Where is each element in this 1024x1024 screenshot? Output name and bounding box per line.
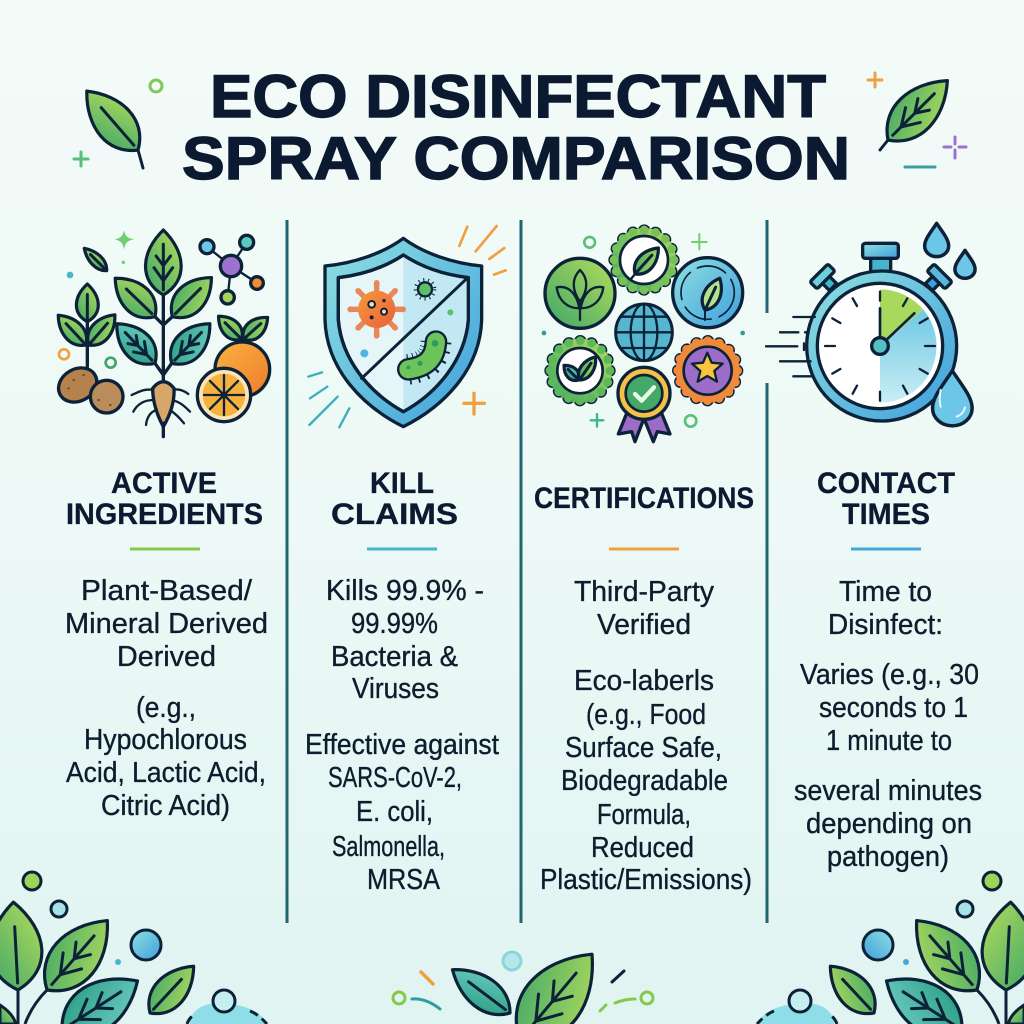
pathogens text bbox=[305, 729, 499, 896]
examples text: Hypochlorous bbox=[84, 724, 247, 756]
column dividers bbox=[287, 220, 767, 923]
virus bbox=[348, 281, 406, 338]
heading bbox=[817, 467, 955, 531]
small green microbe bbox=[416, 280, 434, 299]
badge: orange star seal bbox=[676, 339, 740, 403]
pathogens text: SARS-CoV-2, bbox=[328, 762, 462, 794]
examples text: Acid, Lactic Acid, bbox=[66, 757, 266, 789]
heading: ACTIVE bbox=[111, 467, 217, 500]
badge: scalloped leaf bbox=[612, 228, 676, 292]
primary text bbox=[326, 575, 484, 705]
badge: green plant circle bbox=[545, 258, 615, 328]
column 1: active ingredients bbox=[65, 467, 268, 822]
heading bbox=[331, 467, 458, 531]
column 2: kill claims bbox=[305, 467, 499, 896]
heading bbox=[66, 467, 263, 531]
heading: CONTACT bbox=[817, 467, 955, 500]
primary text bbox=[65, 575, 268, 673]
badge: scalloped sprout bbox=[548, 339, 612, 403]
duration text: seconds to 1 bbox=[819, 692, 968, 724]
heading: TIMES bbox=[842, 498, 930, 531]
primary text: Plant-Based/ bbox=[81, 575, 252, 607]
icon: plants, roots and citrus bbox=[51, 230, 273, 437]
heading: CLAIMS bbox=[331, 498, 458, 531]
decoration: bottom-left foliage bbox=[0, 872, 267, 1024]
decoration: bottom-right foliage bbox=[757, 872, 1024, 1024]
column 4: contact times bbox=[794, 467, 982, 873]
primary text: 99.99% bbox=[351, 608, 438, 640]
primary text: Derived bbox=[117, 641, 216, 673]
primary text: Kills 99.9% - bbox=[326, 575, 484, 607]
duration text: Varies (e.g., 30 bbox=[800, 659, 979, 691]
eco-label text: Biodegradable bbox=[561, 765, 728, 797]
duration text: 1 minute to bbox=[826, 725, 952, 757]
examples text: Citric Acid) bbox=[101, 790, 230, 822]
badge: globe bbox=[616, 304, 672, 361]
heading: CERTIFICATIONS bbox=[534, 482, 754, 515]
pathogens text: Effective against bbox=[305, 729, 499, 761]
icon: shield with virus and bacteria bbox=[308, 226, 506, 427]
primary text: Mineral Derived bbox=[65, 608, 268, 640]
eco-label text: Formula, bbox=[597, 799, 691, 831]
duration text bbox=[794, 659, 982, 873]
duration text: several minutes bbox=[794, 775, 982, 807]
icon: right header leaf bbox=[868, 66, 966, 167]
icon: stopwatch with water drops bbox=[766, 223, 975, 426]
badge: teal leaf circle bbox=[673, 258, 743, 328]
column 3: certifications bbox=[534, 482, 754, 896]
pathogens text: MRSA bbox=[367, 864, 440, 896]
title: SPRAY COMPARISON bbox=[182, 125, 850, 192]
icon: left header leaf bbox=[73, 79, 162, 168]
primary text: Time to bbox=[839, 576, 932, 608]
heading: KILL bbox=[370, 467, 434, 500]
primary text: Bacteria & bbox=[331, 641, 458, 673]
eco-label text bbox=[540, 665, 752, 896]
eco-label text: Reduced bbox=[591, 832, 694, 864]
badge: check rosette with ribbon bbox=[618, 367, 670, 442]
title bbox=[182, 63, 850, 192]
title: ECO DISINFECTANT bbox=[210, 63, 826, 130]
primary text: Disinfect: bbox=[828, 609, 943, 641]
primary text bbox=[828, 576, 943, 641]
eco-label text: Plastic/Emissions) bbox=[540, 864, 752, 896]
eco-label text: Surface Safe, bbox=[565, 732, 722, 764]
heading: INGREDIENTS bbox=[66, 498, 263, 531]
pathogens text: E. coli, bbox=[356, 796, 433, 828]
duration text: pathogen) bbox=[827, 841, 949, 873]
pathogens text: Salmonella, bbox=[332, 831, 445, 863]
examples text bbox=[66, 692, 266, 822]
decoration: bottom-center leaves bbox=[393, 935, 653, 1024]
primary text: Viruses bbox=[352, 673, 439, 705]
primary text: Verified bbox=[597, 609, 691, 641]
duration text: depending on bbox=[806, 808, 972, 840]
examples text: (e.g., bbox=[136, 692, 196, 724]
primary text bbox=[574, 576, 715, 641]
icon: certification badges bbox=[542, 228, 745, 442]
bacterium bbox=[406, 340, 438, 369]
primary text: Third-Party bbox=[574, 576, 715, 608]
eco-label text: (e.g., Food bbox=[586, 699, 706, 731]
eco-label text: Eco-laberls bbox=[574, 665, 714, 697]
